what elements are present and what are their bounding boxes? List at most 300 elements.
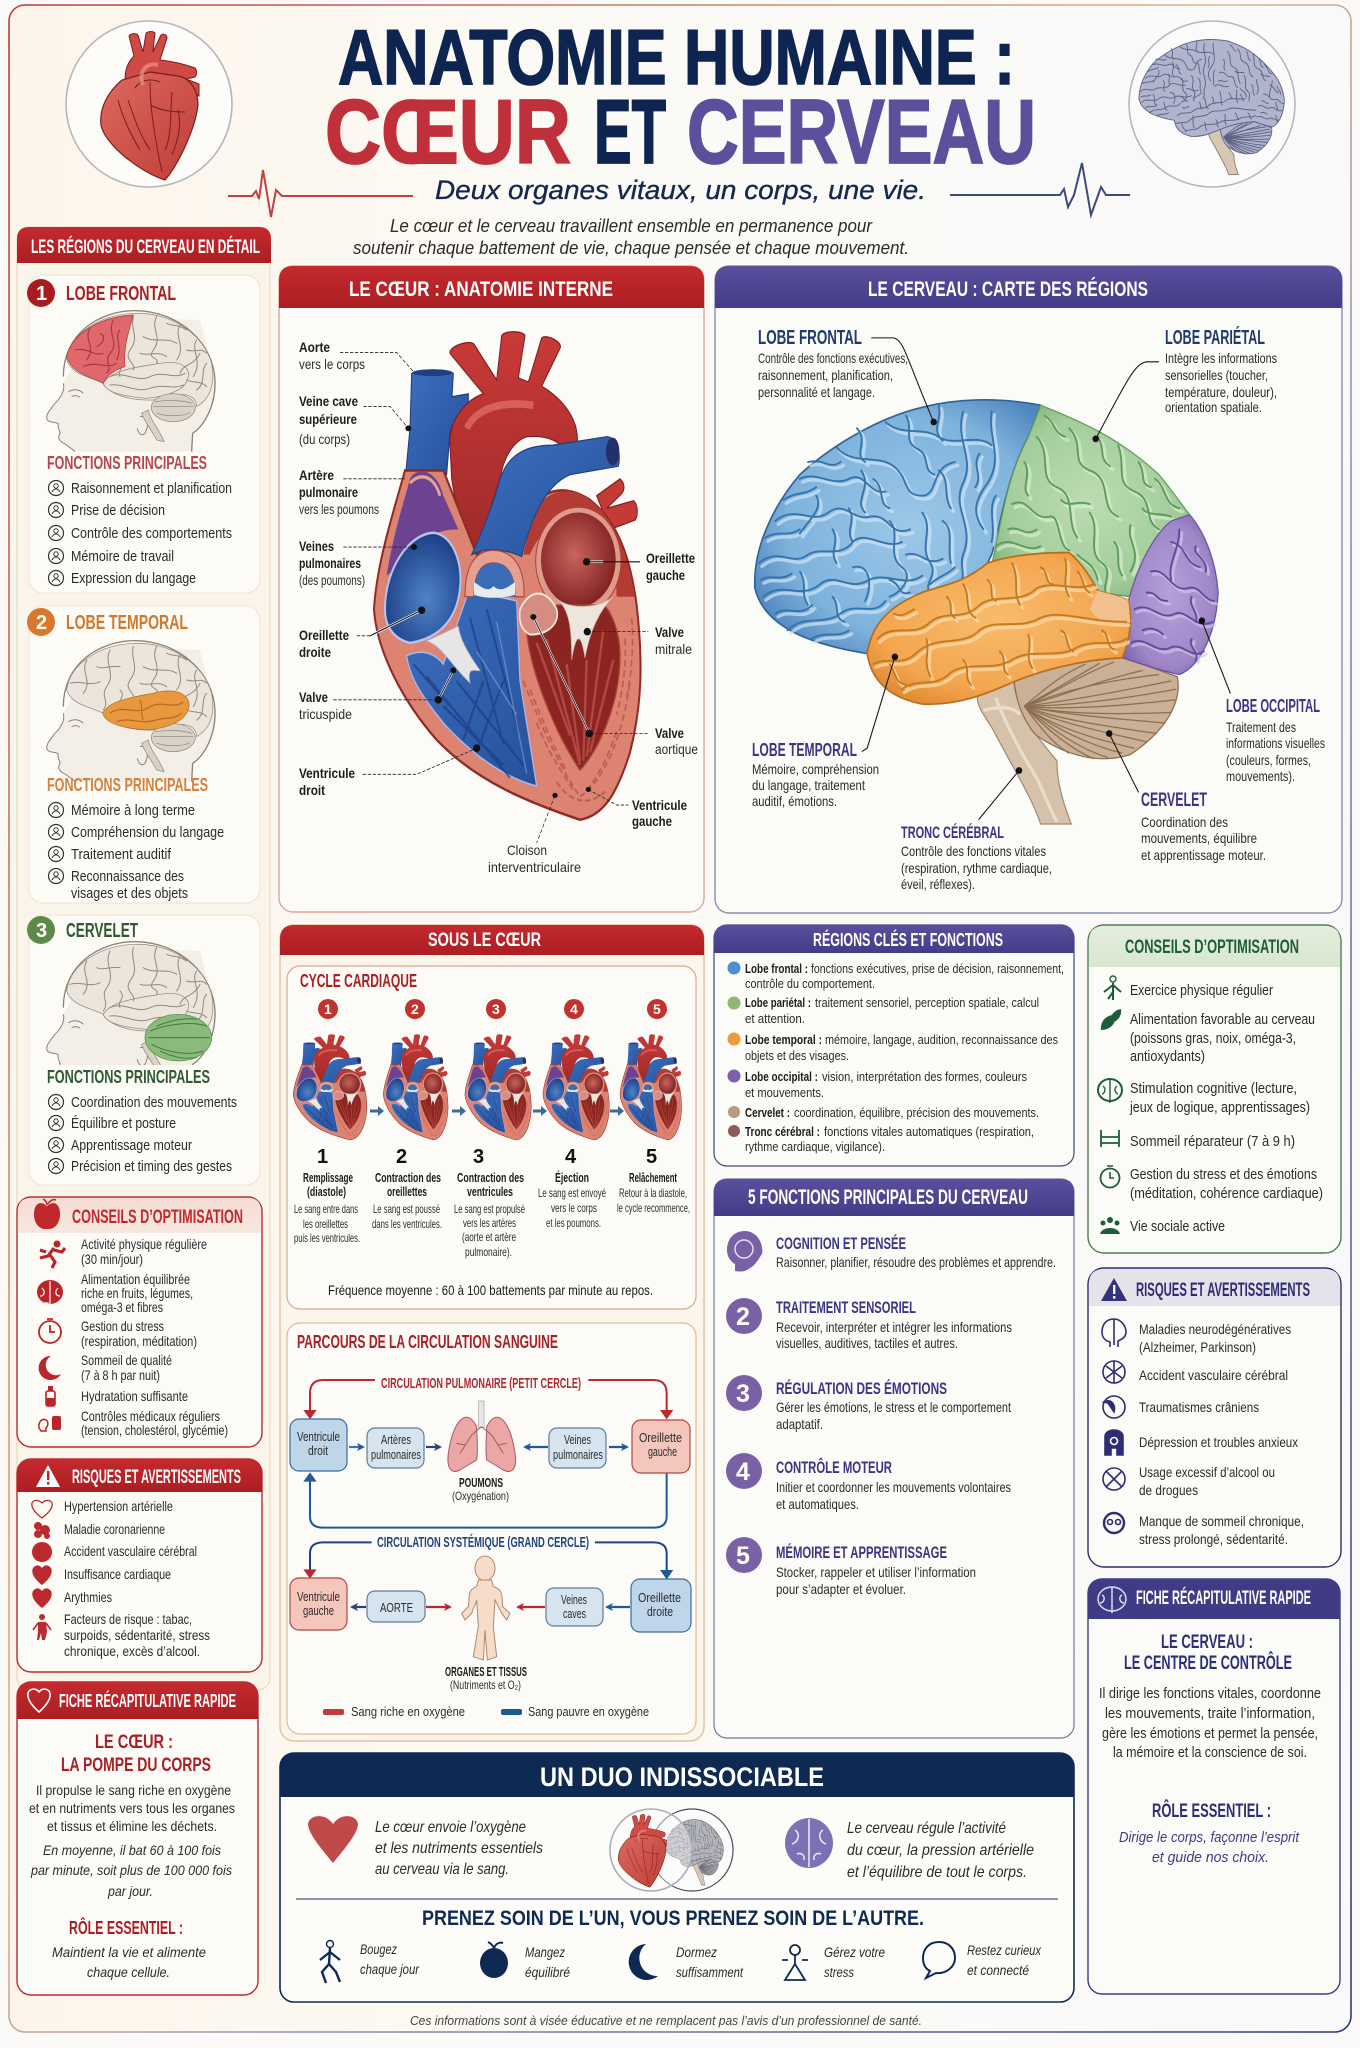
heart text: Le cœur envoie l’oxygène [375, 1819, 526, 1836]
item 4 [726, 1453, 1011, 1512]
panel: risques left: chronique, excès d’alcool. [64, 1643, 200, 1659]
labels: heart: Aorte [299, 339, 330, 355]
panel: conseils left: Hydratation suffisante [81, 1388, 188, 1404]
labels: brain: mouvements). [1226, 768, 1295, 784]
header: brain illustration [1129, 21, 1295, 187]
heart text [375, 1819, 543, 1878]
ECG line right [950, 163, 1130, 215]
panel: conseils left: (30 min/jour) [81, 1251, 143, 1267]
step text: le cycle recommence, [617, 1201, 690, 1215]
flow box labels: droite [647, 1604, 673, 1619]
step badges: 3 [492, 1001, 500, 1017]
care tips [360, 1941, 1042, 1980]
subtitle: Deux organes vitaux, un corps, une vie. [435, 175, 926, 205]
item 2: TRAITEMENT SENSORIEL [776, 1298, 916, 1317]
flow box labels: gauche [648, 1444, 677, 1459]
care tips: équilibré [525, 1964, 570, 1980]
flow box labels: caves [563, 1606, 586, 1621]
header: heart illustration [66, 21, 232, 187]
item 2: 2 [736, 1303, 750, 1331]
panel: carte du cerveau [715, 266, 1342, 913]
icon: red heart [308, 1816, 358, 1863]
heading: SOUS LE CŒUR [428, 930, 541, 951]
card: lobe temporal: FONCTIONS PRINCIPALES [47, 775, 208, 795]
panel: conseils left: Gestion du stress [81, 1318, 164, 1334]
step text [294, 1146, 690, 1259]
title: CŒUR [325, 82, 571, 183]
labels: brain: LOBE PARIÉTAL [1165, 326, 1265, 349]
panel: risques right: Manque de sommeil chronique, [1139, 1513, 1304, 1529]
card: cervelet: Précision et timing des gestes [71, 1158, 232, 1175]
panel: cinq fonctions: 5 FONCTIONS PRINCIPALES DU CERVEAU [748, 1186, 1028, 1209]
panel: risques left: RISQUES ET AVERTISSEMENTS [72, 1467, 241, 1488]
step badges: 4 [570, 1001, 578, 1017]
panel: conseils left: riche en fruits, légumes, [81, 1285, 193, 1301]
step text: puis les ventricules. [294, 1231, 360, 1245]
panel: fiche coeur: En moyenne, il bat 60 à 100 fois [43, 1842, 221, 1858]
step text: vers les artères [463, 1216, 516, 1230]
panel: conseils right: antioxydants) [1130, 1048, 1205, 1065]
labels: brain: Intègre les informations [1165, 350, 1277, 366]
heading: LE CERVEAU : CARTE DES RÉGIONS [868, 278, 1148, 301]
heading: LE CŒUR : ANATOMIE INTERNE [349, 278, 613, 301]
card: cervelet: Apprentissage moteur [71, 1137, 192, 1154]
step badges: 1 [324, 1001, 332, 1017]
card: cervelet: 3 [36, 920, 47, 942]
icon: body [462, 1556, 510, 1660]
panel: conseils left: oméga-3 et fibres [81, 1299, 163, 1315]
panel: regions cles: Lobe frontal : [745, 961, 808, 976]
item 2: Recevoir, interpréter et intégrer les informations [776, 1319, 1012, 1335]
card: circulation [287, 1323, 696, 1734]
panel: conseils right: Exercice physique régulier [1130, 982, 1273, 999]
panel: anatomie du coeur [279, 266, 704, 912]
care tips: stress [824, 1964, 854, 1980]
item 3: RÉGULATION DES ÉMOTIONS [776, 1379, 947, 1398]
panel: regions cles: coordination, équilibre, précision des mouvements. [794, 1105, 1039, 1120]
panel: fiche cerveau [1088, 1579, 1340, 1994]
labels: heart: Ventricule [299, 765, 355, 781]
panel: conseils right: Gestion du stress et des émotions [1130, 1166, 1317, 1183]
care tips: et connecté [967, 1962, 1029, 1978]
brainstem [977, 681, 1071, 824]
labels: brain: Coordination des [1141, 814, 1228, 830]
labels: brain: (respiration, rythme cardiaque, [901, 860, 1052, 876]
legend: Sang riche en oxygène [351, 1704, 465, 1719]
panel: fiche cerveau: RÔLE ESSENTIEL : [1152, 1800, 1271, 1822]
card: lobe frontal: Raisonnement et planification [71, 480, 232, 497]
labels: heart: supérieure [299, 411, 357, 427]
panel: conseils left: Sommeil de qualité [81, 1352, 172, 1368]
step badges: 2 [411, 1001, 419, 1017]
step badges: 5 [653, 1001, 661, 1017]
legend [323, 1704, 649, 1719]
panel: risques right: Usage excessif d’alcool ou [1139, 1464, 1275, 1480]
flow box labels: gauche [303, 1603, 334, 1618]
icon: warning [36, 1465, 60, 1487]
panel: fiche coeur: et tissus et élimine les déchets. [47, 1818, 217, 1834]
panel: conseils left: Activité physique régulière [81, 1236, 207, 1252]
flow box labels: Veines [561, 1592, 587, 1607]
labels: brain: CERVELET [1141, 790, 1207, 811]
panel: conseils right: Sommeil réparateur (7 à 9 h) [1130, 1133, 1295, 1150]
step text: Éjection [555, 1170, 589, 1185]
card: lobe frontal: FONCTIONS PRINCIPALES [47, 453, 207, 473]
item 5: pour s’adapter et évoluer. [776, 1581, 906, 1597]
panel: risques right: Dépression et troubles anxieux [1139, 1434, 1298, 1450]
panel: risques left: Facteurs de risque : tabac, [64, 1611, 192, 1627]
step badges [318, 999, 667, 1019]
flow box labels: pulmonaires [553, 1447, 603, 1462]
brain text: et l’équilibre de tout le corps. [847, 1864, 1027, 1881]
labels: brain: mouvements, équilibre [1141, 830, 1257, 846]
item 3: Gérer les émotions, le stress et le comportement [776, 1399, 1011, 1415]
panel: conseils left: (7 à 8 h par nuit) [81, 1367, 160, 1383]
step text: Retour à la diastole, [619, 1186, 687, 1200]
flow box labels: Ventricule [297, 1429, 340, 1444]
intro text [353, 216, 909, 258]
step text: Remplissage [303, 1170, 353, 1185]
icons: advice [37, 1241, 65, 1431]
panel: conseils left: Alimentation équilibrée [81, 1271, 190, 1287]
item 5: 5 [736, 1542, 750, 1570]
labels: heart: interventriculaire [488, 859, 581, 875]
panel: risques left [17, 1459, 262, 1672]
step text: oreillettes [387, 1184, 427, 1199]
panel: conseils right: (méditation, cohérence cardiaque) [1130, 1185, 1323, 1202]
panel: regions cles: Lobe temporal : [745, 1032, 822, 1047]
card: circulation: POUMONS [459, 1475, 503, 1490]
care tips: Bougez [360, 1941, 397, 1957]
care tips: suffisamment [676, 1964, 744, 1980]
panel: risques left: Arythmies [64, 1589, 112, 1605]
panel: cinq fonctions [714, 1179, 1074, 1738]
panel: fiche coeur: chaque cellule. [87, 1964, 170, 1980]
card: lobe temporal: LOBE TEMPORAL [66, 612, 188, 634]
panel: regions cles: contrôle du comportement. [745, 976, 875, 991]
labels: heart: Veine cave [299, 393, 358, 409]
labels: brain: du langage, traitement [752, 777, 865, 793]
labels: brain: Contrôle des fonctions exécutives, [758, 350, 908, 366]
labels: brain: éveil, réflexes). [901, 876, 975, 892]
labels: heart: vers les poumons [299, 501, 379, 517]
labels: brain [752, 326, 1325, 892]
panel: sous le coeur [280, 925, 704, 1741]
step text: Le sang entre dans [294, 1202, 358, 1216]
card: lobe frontal: LOBE FRONTAL [66, 283, 176, 305]
card: circulation: ORGANES ET TISSUS [445, 1664, 527, 1679]
mini hearts [293, 1035, 682, 1140]
panel: regions cles: vision, interprétation des formes, couleurs [822, 1069, 1027, 1084]
item 4: Initier et coordonner les mouvements volontaires [776, 1479, 1011, 1495]
icon: warning [1101, 1278, 1127, 1301]
flow box labels: Ventricule [297, 1589, 340, 1604]
labels: heart: Cloison [507, 842, 547, 858]
care tips: chaque jour [360, 1961, 420, 1977]
panel: risques right: Maladies neurodégénératives [1139, 1321, 1291, 1337]
card: cycle cardiaque: CYCLE CARDIAQUE [300, 971, 417, 991]
panel: fiche coeur: par jour. [107, 1883, 153, 1899]
intro text: soutenir chaque battement de vie, chaque pensée et chaque mouvement. [353, 238, 909, 258]
panel: fiche coeur [17, 1682, 258, 1995]
labels: brain: informations visuelles [1226, 735, 1325, 751]
card: lobe temporal: visages et des objets [71, 885, 188, 902]
tagline: PRENEZ SOIN DE L’UN, VOUS PRENEZ SOIN DE L’AUTRE. [422, 1907, 924, 1930]
panel: risques right: Traumatismes crâniens [1139, 1399, 1259, 1415]
step text: 4 [565, 1146, 577, 1168]
labels: brain: Traitement des [1226, 719, 1296, 735]
card: lobe temporal: Reconnaissance des [71, 868, 184, 885]
flow box labels: AORTE [380, 1600, 413, 1615]
panel: conseils right: Stimulation cognitive (lecture, [1130, 1080, 1297, 1097]
labels: heart: Veines [299, 538, 334, 554]
illustration: heart and brain [610, 1809, 733, 1891]
step text: (diastole) [307, 1184, 346, 1199]
title: CERVEAU [687, 82, 1036, 183]
card: circulation: CIRCULATION SYSTÉMIQUE (GRAND CERCLE) [377, 1534, 589, 1551]
ECG line left [228, 170, 413, 217]
card: cervelet: FONCTIONS PRINCIPALES [47, 1067, 210, 1087]
labels: heart: Valve [655, 725, 684, 741]
labels: heart: Oreillette [299, 627, 349, 643]
labels: heart: gauche [632, 813, 672, 829]
labels: heart: tricuspide [299, 706, 352, 722]
panel: risques right: Accident vasculaire cérébral [1139, 1367, 1288, 1383]
item 1: COGNITION ET PENSÉE [776, 1234, 906, 1253]
legend: Sang pauvre en oxygène [528, 1704, 649, 1719]
icon: lungs [448, 1401, 516, 1471]
panel: fiche coeur: Maintient la vie et alimente [52, 1944, 206, 1960]
panel: regions cles: mémoire, langage, audition, reconnaissance des [825, 1032, 1058, 1047]
labels: heart: aortique [655, 741, 698, 757]
icon: apple [34, 1199, 60, 1229]
panel: fiche coeur: FICHE RÉCAPITULATIVE RAPIDE [59, 1690, 236, 1711]
step text: 5 [646, 1146, 657, 1168]
labels: brain: LOBE FRONTAL [758, 327, 862, 349]
labels: heart: gauche [646, 567, 685, 583]
panel: conseils right: Vie sociale active [1130, 1218, 1225, 1235]
icon row [320, 1940, 955, 1983]
panel: un duo indissociable [280, 1753, 1074, 2002]
panel: regions cles: RÉGIONS CLÉS ET FONCTIONS [813, 929, 1003, 950]
step text: dans les ventricules. [372, 1217, 442, 1231]
panel: regions cles: rythme cardiaque, vigilance). [745, 1139, 885, 1154]
icons: green advice [1098, 976, 1122, 1234]
care tips: Gérez votre [824, 1944, 885, 1960]
labels: heart: mitrale [655, 641, 692, 657]
card: cycle cardiaque [287, 966, 696, 1309]
cerebellum [1014, 658, 1178, 759]
step text: vers le corps [551, 1201, 597, 1215]
panel: risques right: stress prolongé, sédentarité. [1139, 1531, 1288, 1547]
flow box labels: Oreillette [639, 1430, 682, 1445]
step text: Le sang est propulsé [454, 1202, 525, 1216]
panel: fiche cerveau: gère les émotions et permet la pensée, [1102, 1725, 1318, 1742]
brain diagram [755, 338, 1230, 824]
panel: conseils right: Alimentation favorable au cerveau [1130, 1011, 1315, 1028]
panel: conseils left: Contrôles médicaux réguliers [81, 1408, 220, 1424]
labels: heart: Artère [299, 467, 334, 483]
lobe occipital [1122, 515, 1218, 675]
panel: regions cles: Lobe occipital : [745, 1069, 818, 1084]
panel: conseils right: jeux de logique, apprentissages) [1129, 1099, 1310, 1116]
labels: brain: température, douleur), [1165, 384, 1277, 400]
card: lobe frontal: Contrôle des comportements [71, 525, 232, 542]
panel: un duo indissociable: UN DUO INDISSOCIABLE [540, 1762, 824, 1792]
circuit arrows [303, 1380, 673, 1579]
card: lobe frontal: Expression du langage [71, 570, 196, 587]
panel: regions cles: fonctions vitales automatiques (respiration, [824, 1124, 1034, 1139]
labels: brain: TRONC CÉRÉBRAL [901, 823, 1004, 842]
legend dots [728, 962, 740, 1137]
labels: heart: (des poumons) [299, 572, 365, 588]
lobe frontal [755, 400, 1041, 654]
panel: fiche coeur: et en nutriments vers tous les organes [29, 1800, 235, 1816]
step text: ventricules [467, 1184, 513, 1199]
icon: purple brain [785, 1818, 833, 1868]
card: lobe temporal: 2 [36, 612, 47, 634]
panel: fiche coeur: RÔLE ESSENTIEL : [69, 1917, 183, 1938]
labels: brain: orientation spatiale. [1165, 399, 1262, 415]
item 3 [726, 1375, 1011, 1432]
pointers [862, 338, 1230, 820]
flow box labels: Artères [381, 1432, 411, 1447]
panel: risques left: surpoids, sédentarité, stress [64, 1627, 210, 1643]
item 3: adaptatif. [776, 1416, 823, 1432]
labels: heart: pulmonaires [299, 555, 361, 571]
panel: regions cles: fonctions exécutives, prise de décision, raisonnement, [811, 961, 1064, 976]
panel: regions cles: traitement sensoriel, perception spatiale, calcul [815, 995, 1039, 1010]
lobe temporal [867, 553, 1130, 704]
card: circulation: CIRCULATION PULMONAIRE (PETIT CERCLE) [381, 1375, 581, 1392]
heart text: et les nutriments essentiels [375, 1840, 543, 1857]
panel: conseils left: (respiration, méditation) [81, 1333, 197, 1349]
step text: Relâchement [629, 1170, 677, 1185]
panel: left column brain regions [17, 227, 271, 1690]
labels: heart: vers le corps [299, 356, 365, 372]
labels: brain: et apprentissage moteur. [1141, 847, 1266, 863]
panel: regions cles: objets et des visages. [745, 1048, 849, 1063]
card: lobe frontal: Prise de décision [71, 502, 165, 519]
step text: (aorte et artère [462, 1230, 516, 1244]
panel: risques left: Insuffisance cardiaque [64, 1566, 171, 1582]
heart text: au cerveau via le sang. [375, 1861, 509, 1878]
item 2: visuelles, auditives, tactiles et autres. [776, 1335, 958, 1351]
flow boxes [290, 1419, 691, 1632]
labels: heart: droit [299, 782, 325, 798]
panel: risques right: de drogues [1139, 1482, 1198, 1498]
card: cervelet: Équilibre et posture [71, 1115, 176, 1132]
labels: heart: Valve [299, 689, 328, 705]
card: lobe frontal: Mémoire de travail [71, 548, 174, 565]
panel: fiche cerveau: la mémoire et la conscience de soi. [1113, 1744, 1307, 1761]
care tips: Dormez [676, 1944, 717, 1960]
step text: 2 [396, 1146, 407, 1168]
card: circulation: PARCOURS DE LA CIRCULATION SANGUINE [297, 1332, 558, 1352]
panel: risques left: Hypertension artérielle [64, 1498, 173, 1514]
heading: LES RÉGIONS DU CERVEAU EN DÉTAIL [31, 236, 260, 258]
panel: conseils left: CONSEILS D’OPTIMISATION [72, 1207, 243, 1228]
item 3: 3 [736, 1380, 750, 1408]
item 5 [726, 1537, 976, 1597]
labels: brain: personnalité et langage. [758, 384, 875, 400]
labels: brain: (couleurs, formes, [1226, 752, 1311, 768]
icon: brain outline [1098, 1587, 1126, 1613]
card: lobe frontal: 1 [36, 283, 47, 305]
intro text: Le cœur et le cerveau travaillent ensemble en permanence pour [390, 216, 873, 236]
panel: regions cles: Tronc cérébral : [745, 1124, 820, 1139]
step text: 3 [473, 1146, 484, 1168]
item 1 [727, 1231, 1056, 1272]
icons: navy risks [1102, 1319, 1126, 1533]
frequency note: Fréquence moyenne : 60 à 100 battements par minute au repos. [328, 1282, 653, 1298]
flow box labels: Oreillette [638, 1590, 681, 1605]
care tips: Mangez [525, 1944, 565, 1960]
panel: regions cles: Lobe pariétal : [745, 995, 811, 1010]
brain text [847, 1820, 1034, 1881]
labels: heart: Ventricule [632, 797, 687, 813]
title: ET [594, 82, 666, 183]
item 5: MÉMOIRE ET APPRENTISSAGE [776, 1543, 947, 1562]
card: lobe temporal: Compréhension du langage [71, 824, 224, 841]
labels: heart: Valve [655, 624, 684, 640]
item 1: Raisonner, planifier, résoudre des problèmes et apprendre. [776, 1254, 1056, 1270]
panel: conseils right [1088, 925, 1341, 1253]
labels: brain: auditif, émotions. [752, 793, 837, 809]
panel: conseils left: (tension, cholestérol, glycémie) [81, 1422, 228, 1438]
card: cervelet: Coordination des mouvements [71, 1094, 237, 1111]
title [325, 13, 1036, 183]
labels: brain: LOBE TEMPORAL [752, 740, 857, 760]
panel: fiche cerveau: LE CERVEAU : [1161, 1632, 1253, 1653]
step arrows [370, 1106, 624, 1116]
labels: brain: Contrôle des fonctions vitales [901, 843, 1046, 859]
labels: heart: Oreillette [646, 550, 695, 566]
panel: fiche cerveau: et guide nos choix. [1152, 1849, 1269, 1866]
labels: heart [299, 339, 698, 875]
step text: Le sang est poussé [373, 1202, 440, 1216]
panel: fiche cerveau: les mouvements, traite l’information, [1105, 1705, 1315, 1722]
flow box labels: pulmonaires [371, 1447, 421, 1462]
step text: et les poumons. [546, 1216, 601, 1230]
panel: risques right: (Alzheimer, Parkinson) [1139, 1339, 1256, 1355]
labels: brain: Mémoire, compréhension [752, 761, 879, 777]
icon: heart outline [28, 1689, 50, 1712]
panel: risques left: Accident vasculaire cérébral [64, 1543, 197, 1559]
panel: fiche coeur: LA POMPE DU CORPS [61, 1755, 211, 1776]
card: circulation: (Oxygénation) [452, 1489, 509, 1503]
panel: fiche cerveau: Il dirige les fonctions vitales, coordonne [1099, 1685, 1321, 1702]
panel: fiche cerveau: Dirige le corps, façonne l’esprit [1119, 1829, 1300, 1846]
brain text: Le cerveau régule l’activité [847, 1820, 1006, 1837]
step text: Contraction des [375, 1170, 441, 1185]
panel: conseils right: (poissons gras, noix, oméga-3, [1130, 1030, 1296, 1047]
card: lobe frontal [27, 275, 260, 593]
lobe parietal [992, 405, 1190, 597]
item 5: Stocker, rappeler et utiliser l’information [776, 1564, 976, 1580]
card: lobe temporal: Traitement auditif [71, 846, 172, 863]
item 4: CONTRÔLE MOTEUR [776, 1458, 892, 1477]
step text: Le sang est envoyé [538, 1186, 606, 1200]
panel: fiche coeur: LE CŒUR : [95, 1732, 173, 1753]
card: lobe temporal: Mémoire à long terme [71, 802, 195, 819]
brain text: du cœur, la pression artérielle [847, 1842, 1034, 1859]
item 4: et automatiques. [776, 1496, 859, 1512]
item 4: 4 [736, 1458, 750, 1486]
step text: Contraction des [457, 1170, 524, 1185]
flow box labels: droit [308, 1443, 328, 1458]
panel: regions cles: Cervelet : [745, 1105, 790, 1120]
